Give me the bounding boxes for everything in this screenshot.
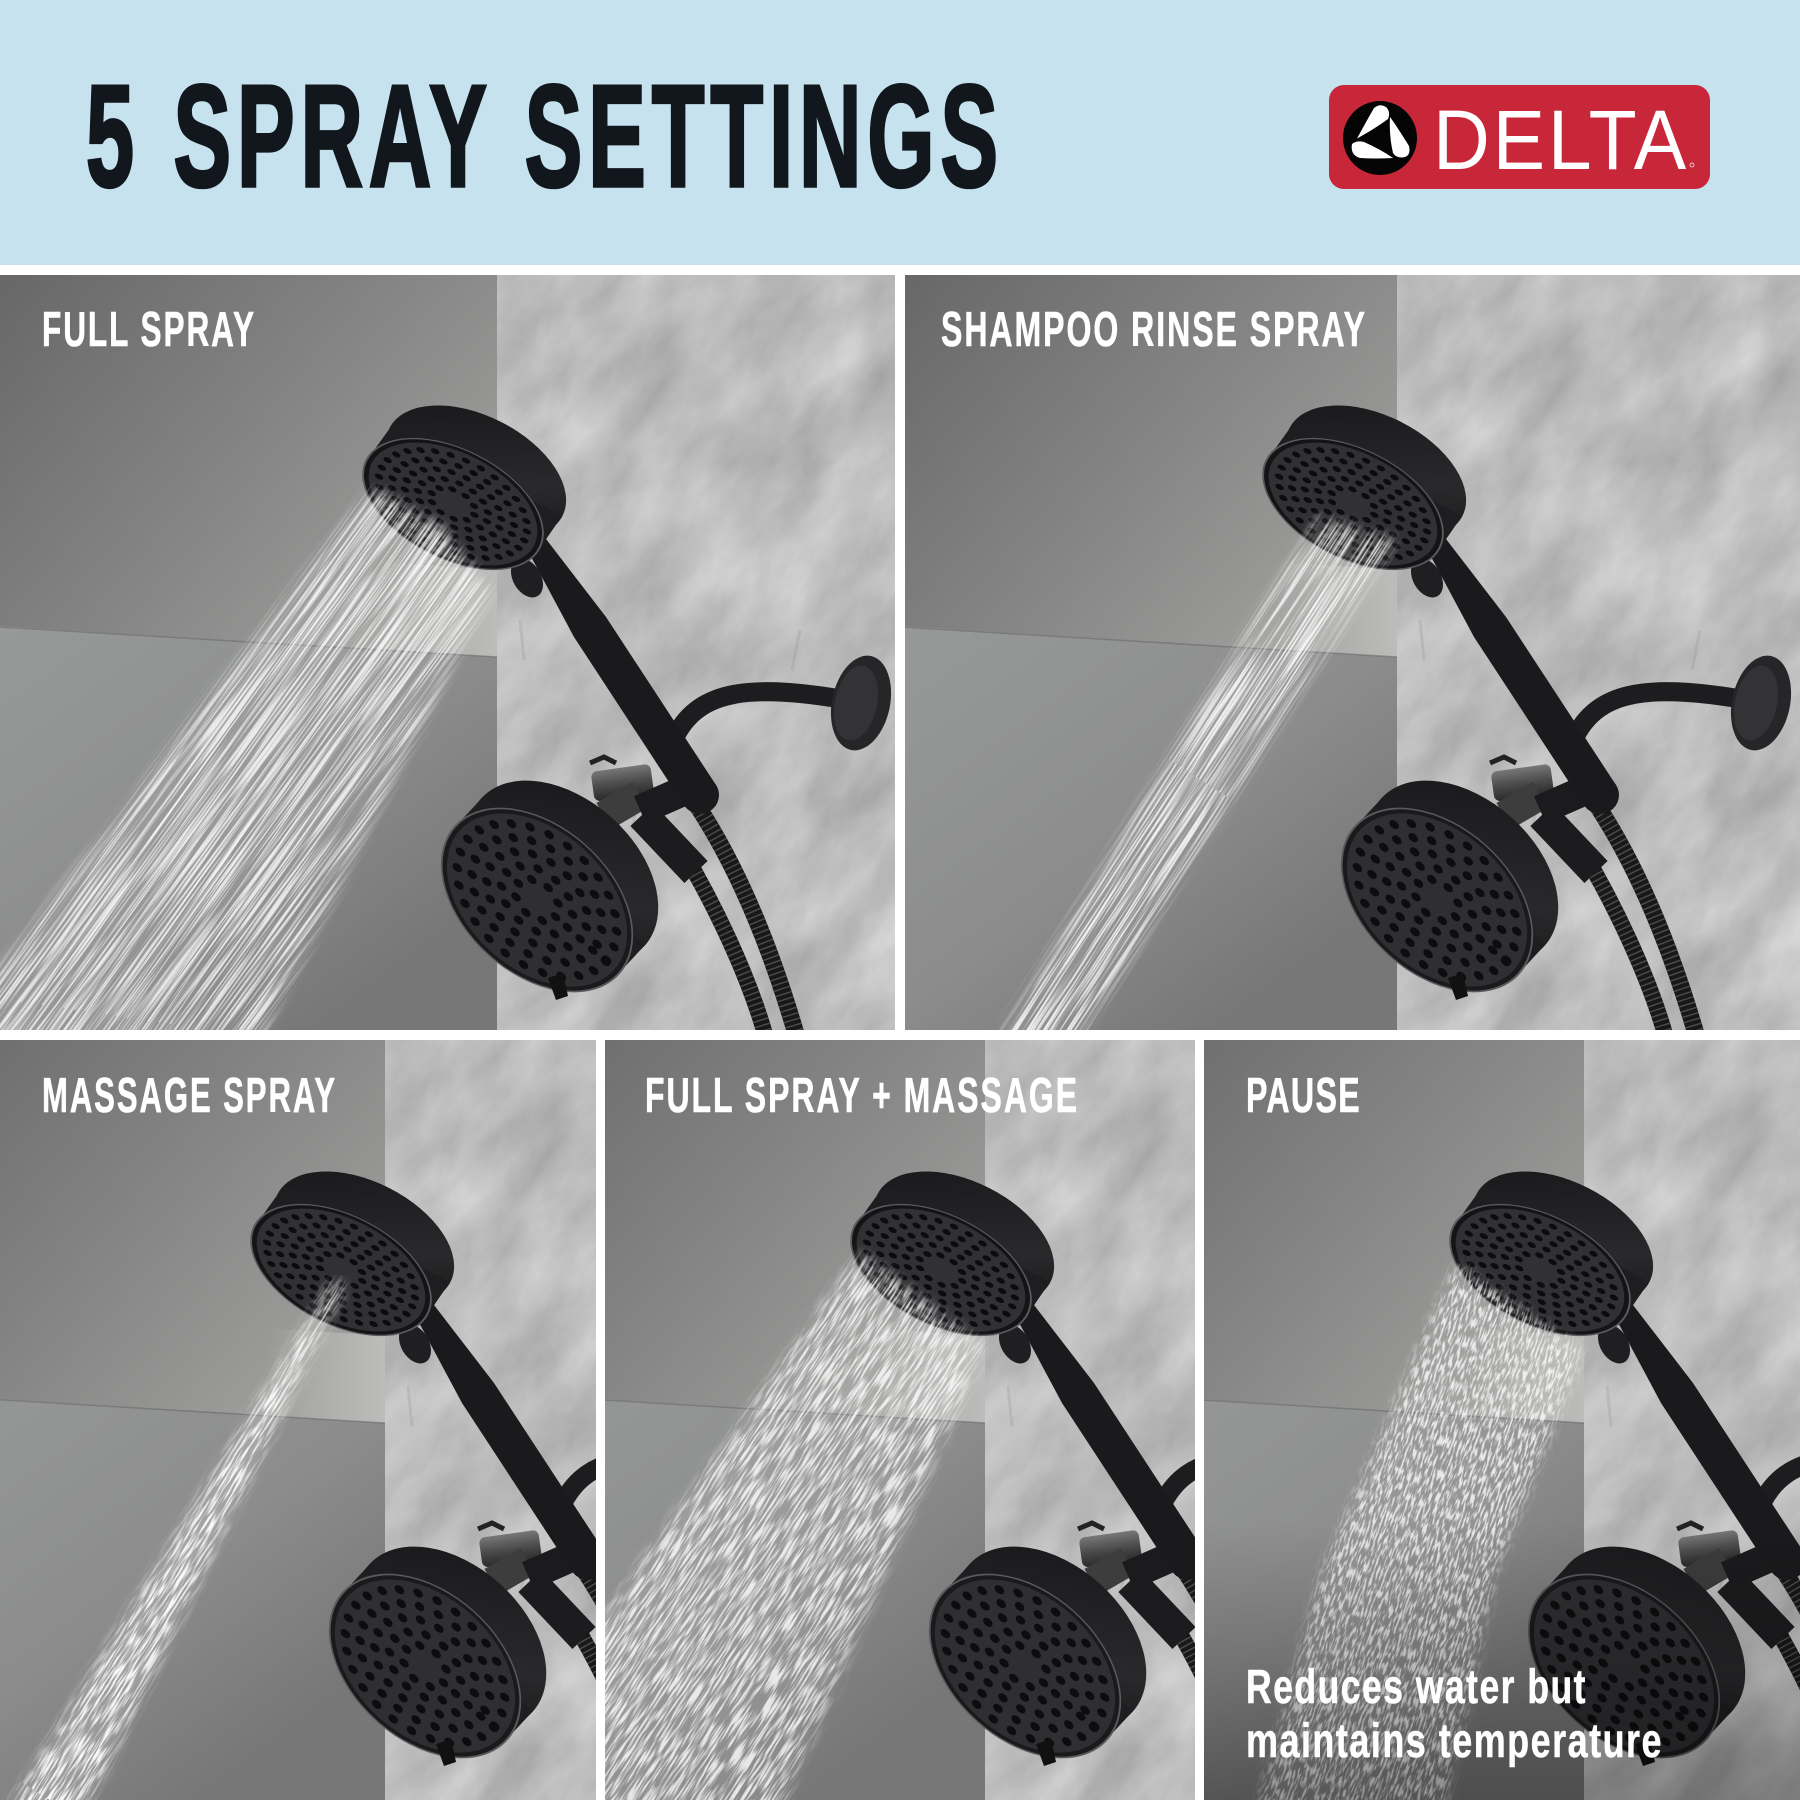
wall background	[900, 270, 1800, 1034]
note	[1246, 1661, 1663, 1768]
bottom shade	[1204, 1520, 1800, 1800]
panel: massage spray	[0, 1040, 596, 1800]
water spray	[1240, 1255, 1600, 1800]
header band	[0, 0, 1800, 265]
wall background	[605, 1040, 1195, 1800]
note: maintains temperature	[1246, 1715, 1663, 1768]
panel: shampoo rinse spray	[900, 270, 1800, 1034]
heading: MASSAGE SPRAY	[42, 1069, 337, 1123]
title: 5 SPRAY SETTINGS	[86, 55, 1004, 217]
shower fixture	[830, 1144, 1387, 1800]
note: Reduces water but	[1246, 1661, 1587, 1714]
shower fixture	[1242, 378, 1799, 1034]
water spray	[605, 1245, 1005, 1800]
panel: pause	[1087, 1036, 1800, 1800]
wall background	[1087, 1036, 1800, 1800]
water spray	[0, 480, 500, 1030]
logo: Delta	[1329, 85, 1710, 189]
heading: FULL SPRAY + MASSAGE	[645, 1069, 1079, 1123]
heading: SHAMPOO RINSE SPRAY	[941, 303, 1367, 357]
panel: full spray	[0, 270, 900, 1034]
logo: Delta: DELTA	[1433, 93, 1689, 187]
heading: FULL SPRAY	[42, 303, 256, 357]
heading: PAUSE	[1246, 1069, 1361, 1123]
water spray	[998, 510, 1400, 1030]
shower fixture	[1429, 1144, 1800, 1800]
water spray	[0, 1275, 360, 1800]
shower fixture	[342, 378, 899, 1034]
wall background	[0, 1040, 596, 1800]
panel: full spray + massage	[605, 1040, 1195, 1800]
wall background	[0, 270, 900, 1034]
shower fixture	[230, 1144, 787, 1800]
